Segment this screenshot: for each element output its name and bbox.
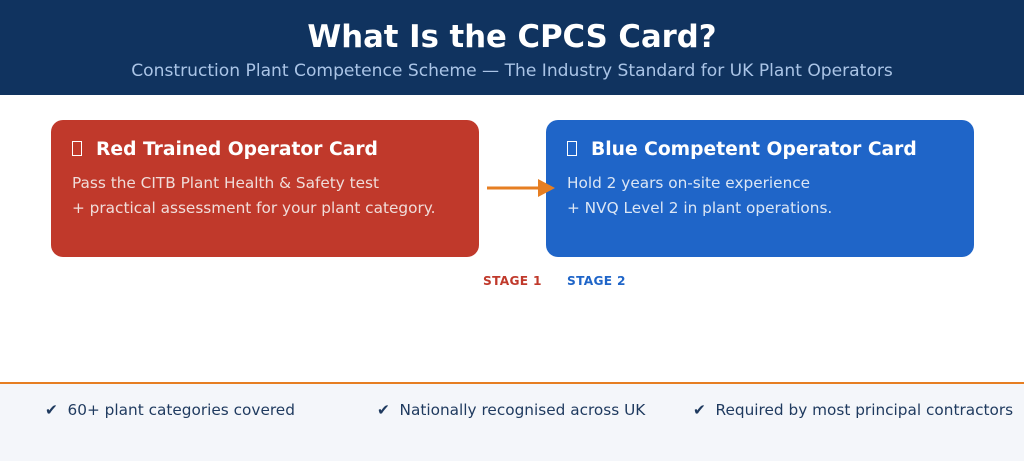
stage 2 label: STAGE 2 <box>567 274 626 288</box>
header band <box>0 0 1024 95</box>
footer band <box>0 382 1024 461</box>
stage 1 label: STAGE 1 <box>483 274 542 288</box>
subtitle: Construction Plant Competence Scheme — The Industry Standard for UK Plant Operators <box>131 61 893 81</box>
red card text: Pass the CITB Plant Health & Safety test <box>72 174 379 192</box>
title: What Is the CPCS Card? <box>307 20 717 55</box>
panel: blue card <box>546 120 974 257</box>
blue card text: Hold 2 years on-site experience <box>567 174 810 192</box>
footer item 1: ✔ 60+ plant categories covered <box>45 401 295 419</box>
panel: red card <box>51 120 479 257</box>
footer item 3: ✔ Required by most principal contractors <box>693 401 1013 419</box>
arrow <box>487 179 555 197</box>
blue card text: + NVQ Level 2 in plant operations. <box>567 199 832 217</box>
footer item 2: ✔ Nationally recognised across UK <box>377 401 645 419</box>
red card heading: Red Trained Operator Card <box>96 139 378 160</box>
blue card text <box>567 174 832 217</box>
red card text: + practical assessment for your plant category. <box>72 199 435 217</box>
red card text <box>72 174 435 217</box>
blue card heading: Blue Competent Operator Card <box>591 139 917 160</box>
